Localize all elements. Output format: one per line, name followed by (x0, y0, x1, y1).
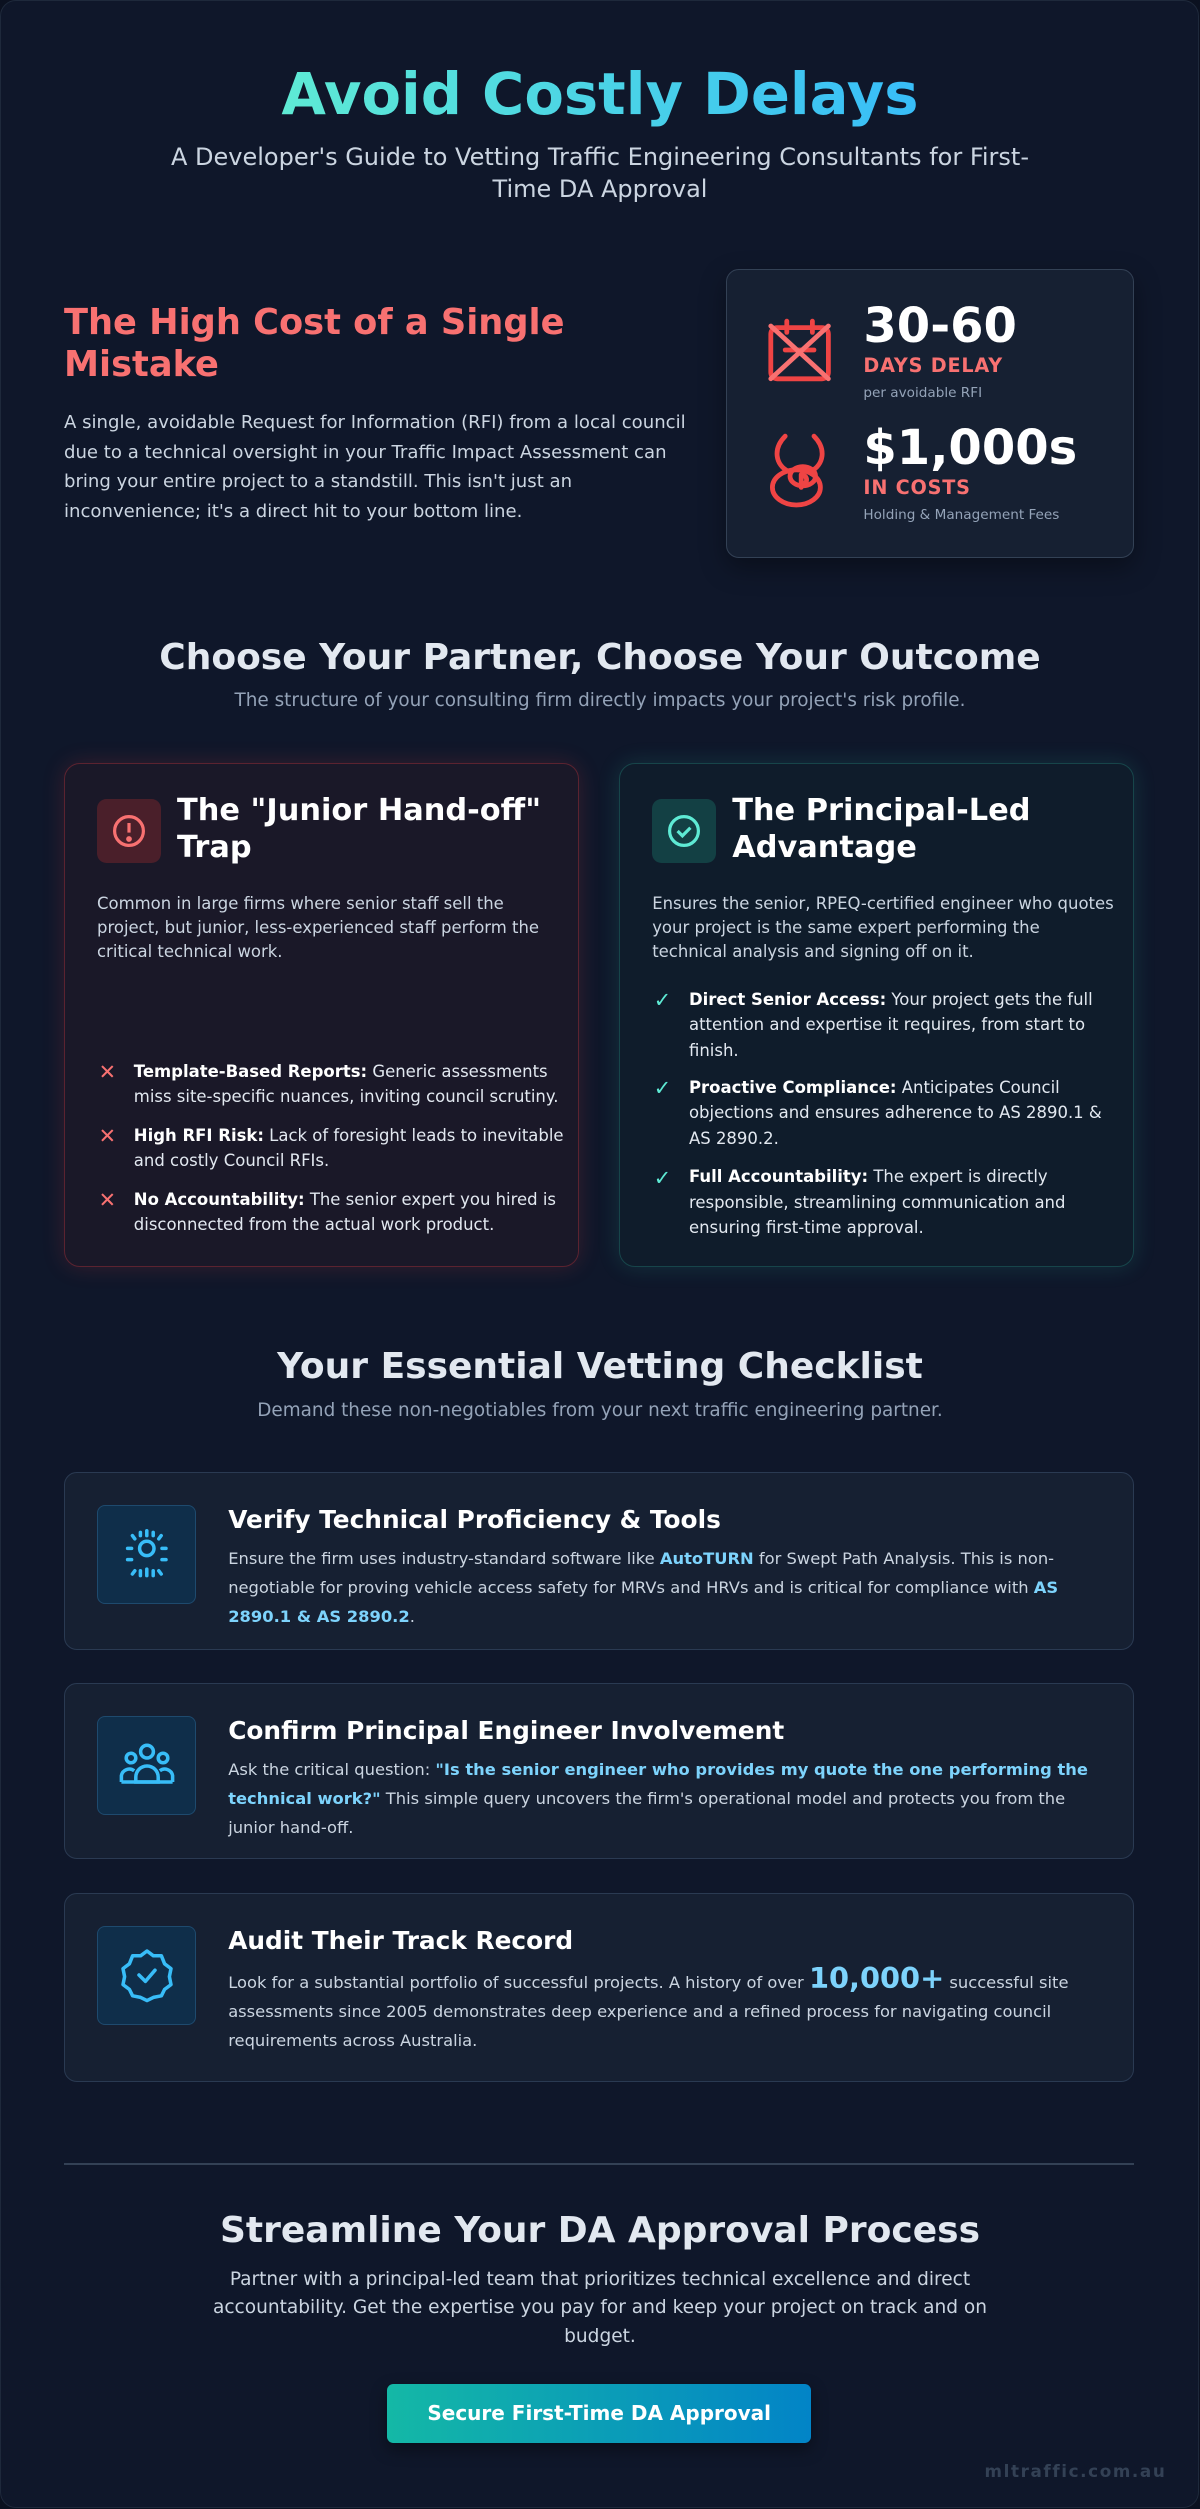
stat: costs (863, 420, 1077, 523)
text: closing paragraph: Partner with a principal-led team that prioritizes technical excellence and direct accountability. Get the expertise you pay for and keep your project on track and on budget. (213, 2269, 987, 2347)
icon: calendar cross (768, 318, 831, 382)
panel title: The "Junior Hand-off" (177, 793, 541, 828)
icon: team (97, 1716, 196, 1815)
button: CTA (387, 2384, 811, 2443)
stat: costs: IN COSTS (863, 476, 971, 499)
checklist card 1 (64, 1472, 1134, 1650)
bullet: direct access: Direct Senior Access: Your project gets the full attention and expertise it requires, from start to finish. (689, 990, 1093, 1060)
icon: check circle (652, 799, 716, 863)
stat: days delay (863, 298, 1017, 401)
heading: choose partner: Choose Your Partner, Choose Your Outcome (159, 637, 1041, 678)
checklist card 2 (64, 1683, 1134, 1859)
heading: high cost: The High Cost of a Single Mistake (64, 302, 564, 385)
icon: money bag (770, 434, 825, 508)
icon: badge check (97, 1926, 196, 2025)
subheading: choose partner: The structure of your consulting firm directly impacts your project's risk profile. (235, 690, 965, 711)
card title: Verify Technical Proficiency & Tools (228, 1505, 721, 1534)
checklist card 3 (64, 1893, 1134, 2082)
panel title (732, 793, 1031, 865)
panel title: Trap (177, 830, 252, 865)
panel title: The Principal-Led (732, 793, 1031, 828)
card title: Confirm Principal Engineer Involvement (228, 1716, 784, 1745)
panel title (177, 793, 541, 865)
panel: principal-led (619, 763, 1134, 1267)
button: CTA: Secure First-Time DA Approval (427, 2401, 771, 2425)
panel: junior hand-off: ✕ (99, 1060, 116, 1084)
panel: principal-led: ✓ (654, 1166, 671, 1190)
description: Ensures the senior, RPEQ-certified engineer who quotes your project is the same expert performing the technical analysis and signing off on it. (652, 894, 1114, 961)
subheading: checklist: Demand these non-negotiables from your next traffic engineering partner. (257, 1400, 943, 1421)
panel: principal-led: ✓ (654, 1076, 671, 1100)
stat: days delay: DAYS DELAY (863, 354, 1003, 377)
panel: principal-led: ✓ (654, 988, 671, 1012)
card text: Ensure the firm uses industry-standard software like AutoTURN for Swept Path Analysis. This is non-negotiable for proving vehicle access safety for MRVs and HRVs and is critical for compliance with AS 2890.1 & AS 2890.2. (228, 1549, 1058, 1626)
title: Avoid Costly Delays (281, 61, 919, 128)
text: high cost description: A single, avoidable Request for Information (RFI) from a local council due to a technical oversight in your Traffic Impact Assessment can bring your entire project to a standstill. This isn't just an inconvenience; it's a direct hit to your bottom line. (64, 412, 686, 522)
icon: gear (97, 1505, 196, 1604)
subtitle: A Developer's Guide to Vetting Traffic Engineering Consultants for First-Time DA Approval (171, 143, 1029, 203)
card title: Audit Their Track Record (228, 1926, 573, 1955)
stat: costs: $1,000s (863, 420, 1077, 476)
stat: days delay: 30-60 (863, 298, 1017, 354)
bullet: compliance: Proactive Compliance: Anticipates Council objections and ensures adherence to AS 2890.1 & AS 2890.2. (689, 1078, 1102, 1148)
bullet: accountability: Full Accountability: The expert is directly responsible, streamlining communication and ensuring first-time approval. (689, 1167, 1065, 1237)
heading: streamline: Streamline Your DA Approval Process (220, 2210, 980, 2251)
panel: junior hand-off (64, 763, 579, 1267)
card text: Ask the critical question: "Is the senior engineer who provides my quote the one performing the technical work?" This simple query uncovers the firm's operational model and protects you from the junior hand-off. (228, 1760, 1088, 1837)
stat: costs: Holding & Management Fees (863, 507, 1059, 523)
description: Common in large firms where senior staff sell the project, but junior, less-experienced staff perform the critical technical work. (97, 894, 539, 961)
card text: Look for a substantial portfolio of successful projects. A history of over 10,000+ successful site assessments since 2005 demonstrates deep experience and a refined process for navigating council requirements across Australia. (228, 1961, 1068, 2050)
panel: stats (726, 269, 1134, 558)
stat: days delay: per avoidable RFI (863, 385, 982, 401)
bullet: template: Template-Based Reports: Generic assessments miss site-specific nuances, inviting council scrutiny. (134, 1062, 558, 1106)
heading: checklist: Your Essential Vetting Checklist (277, 1346, 923, 1387)
icon: alert (97, 799, 161, 863)
panel title: Advantage (732, 830, 917, 865)
bullet: rfi risk: High RFI Risk: Lack of foresight leads to inevitable and costly Council RFIs. (134, 1126, 564, 1170)
panel: junior hand-off: ✕ (99, 1188, 116, 1212)
bullet: accountability: No Accountability: The senior expert you hired is disconnected from the actual work product. (134, 1190, 556, 1234)
panel: junior hand-off: ✕ (99, 1124, 116, 1148)
footer: website: mltraffic.com.au (985, 2461, 1166, 2481)
